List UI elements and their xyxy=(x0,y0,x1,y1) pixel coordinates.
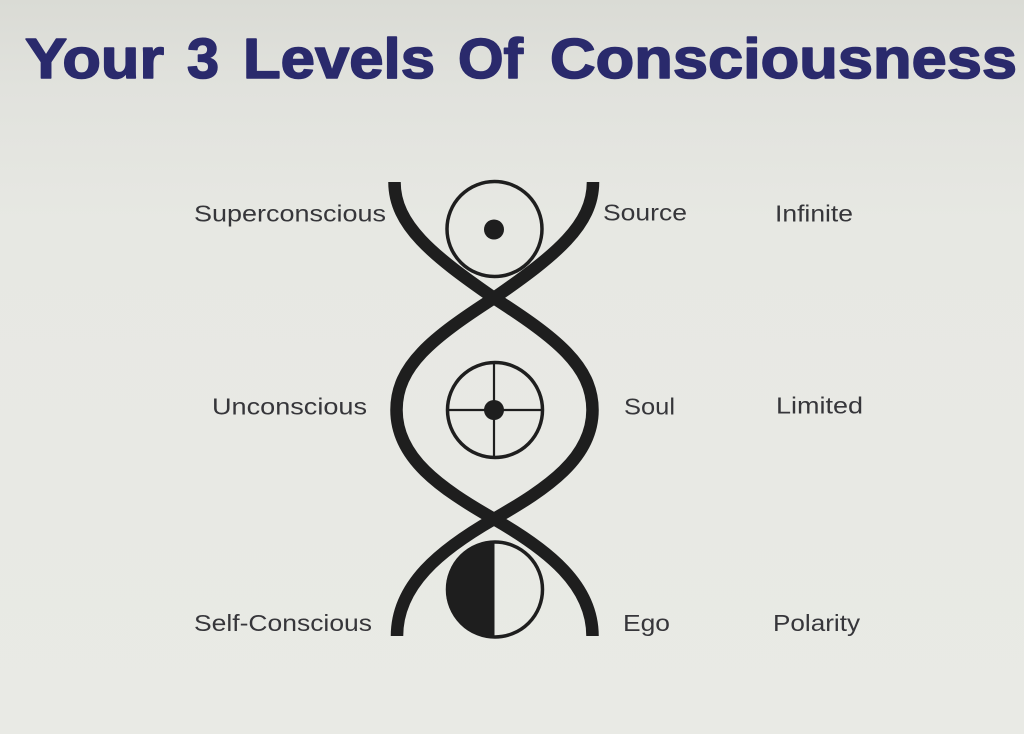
icon: source circle with dot xyxy=(447,182,542,276)
label: Soul: Soul xyxy=(624,393,675,419)
icon: ego half-filled circle xyxy=(446,541,542,638)
title: Levels xyxy=(243,27,435,91)
title xyxy=(25,27,1017,91)
icon: soul circle with crosshair xyxy=(448,362,542,458)
title: 3 xyxy=(187,27,219,91)
label: Infinite: Infinite xyxy=(775,200,853,226)
helix diagram xyxy=(394,182,593,638)
title: Your xyxy=(25,27,164,91)
helix strand: right-start xyxy=(396,182,593,636)
label: Ego: Ego xyxy=(623,610,670,636)
label: Polarity: Polarity xyxy=(773,610,861,636)
label: Self-Conscious: Self-Conscious xyxy=(194,610,372,636)
title: Of xyxy=(458,27,524,91)
helix strand: left-start xyxy=(394,182,592,636)
label: Limited: Limited xyxy=(776,393,863,419)
label: Unconscious: Unconscious xyxy=(212,394,367,420)
title: Consciousness xyxy=(550,27,1017,91)
label: Source: Source xyxy=(603,200,687,226)
label: Superconscious: Superconscious xyxy=(194,200,386,226)
